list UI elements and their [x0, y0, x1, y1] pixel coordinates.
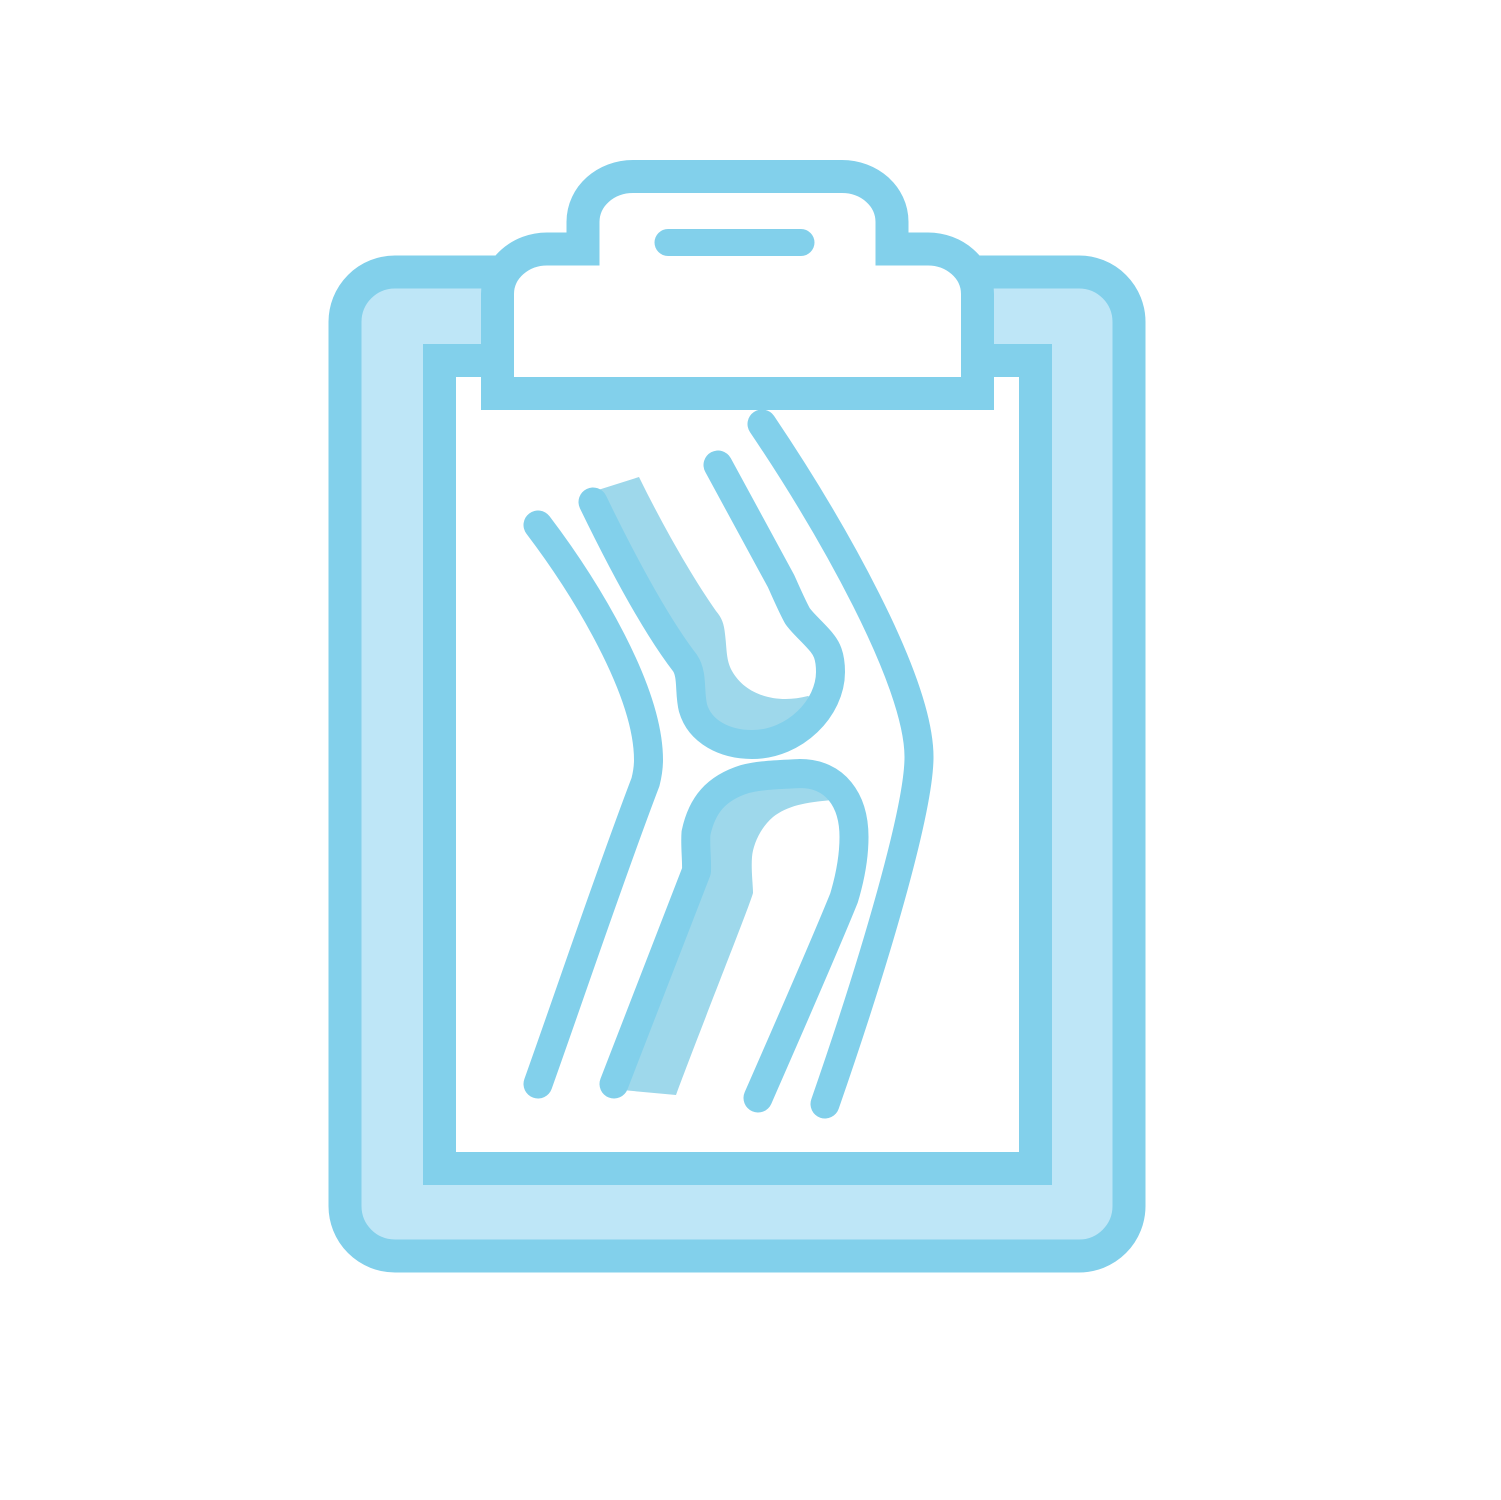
x-ray sheet — [440, 360, 1036, 1168]
clipboard board — [345, 272, 1129, 1256]
femur shading — [598, 477, 815, 744]
tibia — [614, 774, 854, 1098]
front outer line — [762, 424, 919, 1104]
tibia shading — [622, 773, 834, 1095]
knee x-ray illustration — [538, 424, 919, 1104]
outer thigh line — [538, 525, 648, 1084]
femur back line — [593, 465, 830, 744]
clipboard clip — [498, 176, 978, 394]
